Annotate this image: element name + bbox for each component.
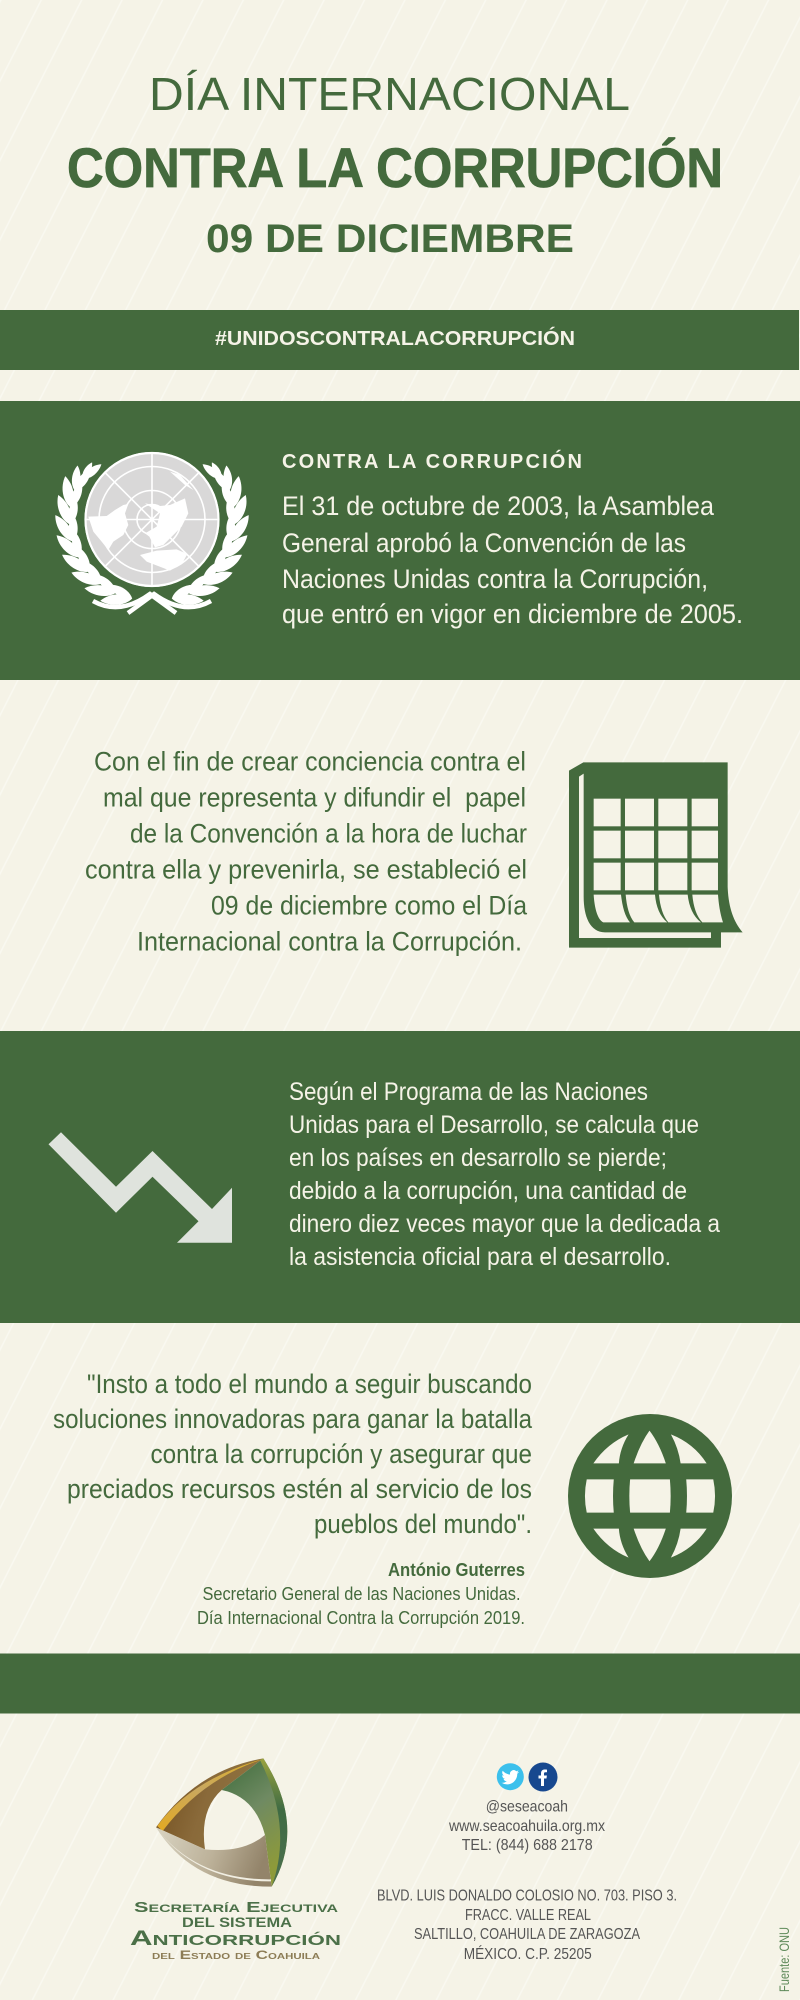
panel: losses <box>0 1031 800 1323</box>
icon: facebook <box>528 1762 558 1792</box>
text block: debido a la corrupción, una cantidad de <box>289 1177 687 1205</box>
title: CONTRA LA CORRUPCIÓN <box>67 136 723 199</box>
text block: awareness <box>85 747 528 957</box>
text block <box>282 491 743 629</box>
text block: en los países en desarrollo se pierde; <box>289 1144 667 1172</box>
text block: awareness: 09 de diciembre como el Día <box>211 891 528 921</box>
text block: awareness: Con el fin de crear conciencia contra el <box>94 747 526 777</box>
title <box>67 68 723 261</box>
attribution: Día Internacional Contra la Corrupción 2019. <box>197 1608 525 1628</box>
panel: convention <box>0 401 800 680</box>
attribution <box>197 1560 525 1628</box>
source note: Fuente: ONU <box>776 1927 792 1992</box>
icon: globe <box>568 1414 732 1578</box>
address: BLVD. LUIS DONALDO COLOSIO NO. 703. PISO 3. <box>377 1888 677 1905</box>
icon: calendar <box>569 762 743 948</box>
attribution: António Guterres <box>388 1560 525 1580</box>
text block: awareness: Internacional contra la Corrupción. <box>137 927 522 957</box>
text block: awareness: contra ella y prevenirla, se estableció el <box>85 855 527 885</box>
title: 09 DE DICIEMBRE <box>206 217 574 261</box>
contact info <box>448 1799 605 1854</box>
address: SALTILLO, COAHUILA DE ZARAGOZA <box>414 1926 640 1943</box>
address: MÉXICO. C.P. 25205 <box>464 1944 592 1963</box>
title: DÍA INTERNACIONAL <box>149 68 630 120</box>
contact info: TEL: (844) 688 2178 <box>462 1837 593 1854</box>
quote: preciados recursos estén al servicio de los <box>67 1474 532 1504</box>
text block: la asistencia oficial para el desarrollo. <box>289 1243 671 1271</box>
text block: que entró en vigor en diciembre de 2005. <box>282 599 743 629</box>
text block: Unidas para el Desarrollo, se calcula que <box>289 1111 699 1139</box>
heading: CONTRA LA CORRUPCIÓN <box>282 449 582 473</box>
attribution: Secretario General de las Naciones Unidas. <box>202 1584 520 1604</box>
icon: twitter <box>497 1763 524 1790</box>
text block: Según el Programa de las Naciones <box>289 1078 648 1106</box>
text block: Naciones Unidas contra la Corrupción, <box>282 564 708 594</box>
text block: awareness: de la Convención a la hora de luchar <box>130 819 527 849</box>
bottom band <box>0 1654 800 1714</box>
hashtag band <box>0 310 799 370</box>
quote <box>53 1369 533 1539</box>
quote: soluciones innovadoras para ganar la batalla <box>53 1404 533 1434</box>
quote: "Insto a todo el mundo a seguir buscando <box>87 1369 532 1399</box>
contact info: @seseacoah <box>486 1799 568 1816</box>
text block: El 31 de octubre de 2003, la Asamblea <box>282 491 715 521</box>
text block: General aprobó la Convención de las <box>282 528 686 558</box>
address: FRACC. VALLE REAL <box>465 1907 591 1924</box>
address <box>377 1888 677 1963</box>
contact info: www.seacoahuila.org.mx <box>448 1818 605 1835</box>
hashtag band: #UNIDOSCONTRALACORRUPCIÓN <box>215 326 575 350</box>
logo: Secretaría Ejecutiva: Secretaría Ejecutiva <box>134 1899 338 1916</box>
icon: falling arrow <box>48 1132 232 1243</box>
quote: contra la corrupción y asegurar que <box>150 1439 532 1469</box>
quote: pueblos del mundo". <box>314 1509 532 1539</box>
text block <box>289 1078 720 1271</box>
logo: Secretaría Ejecutiva <box>130 1758 341 1962</box>
icon: UN emblem <box>51 452 253 613</box>
text block: awareness: mal que representa y difundir el papel <box>103 783 526 813</box>
logo: Secretaría Ejecutiva: del Estado de Coahuila <box>152 1948 320 1962</box>
logo: Secretaría Ejecutiva: Anticorrupción <box>130 1927 341 1950</box>
text block: dinero diez veces mayor que la dedicada a <box>289 1210 720 1238</box>
logo: Secretaría Ejecutiva: DEL SISTEMA <box>182 1914 292 1930</box>
